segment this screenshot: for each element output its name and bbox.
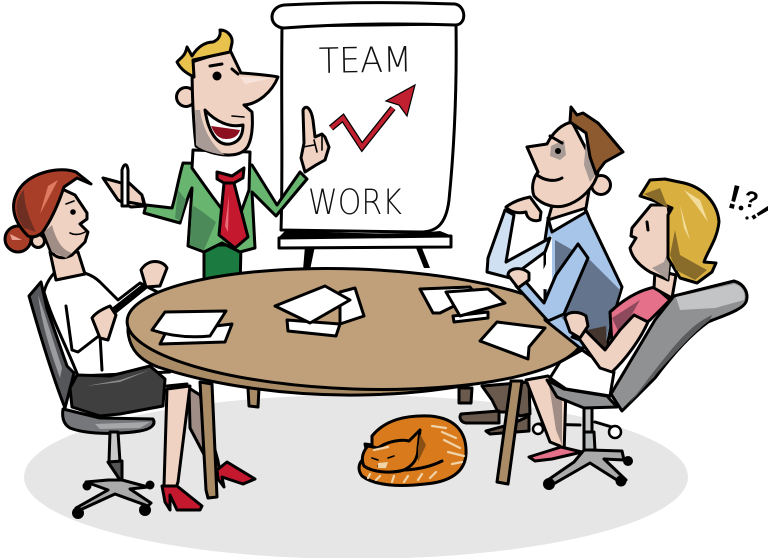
exclamation marks: ?: [742, 185, 760, 213]
left woman's skirt: [70, 366, 165, 416]
left woman's ear: [32, 234, 44, 248]
right woman's legs and pink shoe: [526, 376, 582, 461]
man's torso: [545, 208, 622, 348]
man's dark shadow under torso: [587, 326, 607, 348]
papers front sheet: [480, 322, 545, 359]
chair pole and base: [72, 432, 154, 519]
right woman's neck: [654, 270, 676, 298]
man's shirt collar: [548, 205, 586, 232]
right woman's eye: [647, 222, 648, 230]
right woman's chair seat: [547, 380, 617, 408]
left woman's blouse fold lines: [66, 306, 102, 370]
man's hand under chin: [506, 197, 541, 221]
presenter left hand with pen: [103, 165, 145, 207]
right woman's hair: [640, 179, 719, 283]
presenter in green jacket: [103, 30, 329, 290]
right woman's skirt: [550, 350, 614, 396]
rising red arrow: [331, 85, 415, 147]
table front left leg: [200, 382, 217, 498]
exclamation marks: !: [724, 178, 744, 218]
table back legs: [248, 388, 472, 407]
right woman's arm: [572, 315, 648, 372]
left woman's blouse: [44, 268, 170, 376]
left woman's head: [38, 188, 88, 258]
thinking man in blue shirt: [487, 107, 623, 348]
left woman's chair: [29, 282, 154, 519]
round table: [125, 261, 585, 397]
man's ear: [592, 176, 610, 194]
left woman's neck: [50, 252, 85, 280]
presenter face details: [205, 64, 244, 144]
man's face details: [537, 136, 562, 180]
presenter shirt: [192, 150, 250, 215]
papers on the table: [152, 286, 545, 359]
presenter head: [192, 50, 278, 155]
man's fist on table: [508, 269, 529, 288]
man's raised arm: [487, 210, 550, 278]
left woman's front leg: [164, 384, 190, 488]
left woman: [5, 170, 255, 510]
cat body: [359, 416, 466, 485]
right woman's hand: [565, 312, 588, 338]
flipchart heading TEAM: TEAM: [318, 40, 412, 82]
man's hair: [570, 107, 623, 174]
man's white shirt front: [535, 236, 552, 290]
left woman's hair bun: [5, 226, 31, 252]
table front right leg: [497, 381, 522, 484]
papers right stack: [420, 287, 505, 322]
presenter ear: [176, 88, 196, 106]
papers centre stack: [275, 286, 364, 336]
left woman's back leg: [189, 388, 220, 473]
presenter tie: [217, 168, 248, 248]
presenter hair: [177, 30, 232, 77]
man's head: [527, 122, 598, 207]
presenter jacket and arms: [144, 163, 307, 252]
cat stripes: [368, 426, 464, 482]
flipchart: [272, 3, 464, 270]
presenter trousers: [204, 245, 241, 290]
right woman's head: [630, 205, 672, 280]
left woman's hair: [14, 170, 91, 237]
exclamation marks: [724, 178, 768, 225]
chair seat: [63, 409, 154, 433]
left woman's face details: [66, 201, 87, 234]
presenter right hand pointing up: [301, 107, 329, 172]
right woman's pink top: [610, 287, 670, 345]
floor shadow: [24, 395, 688, 558]
man's torso shadow: [555, 240, 620, 345]
chair back: [29, 282, 74, 408]
left woman's hands and pen: [92, 262, 167, 340]
right woman's chair back: [611, 281, 747, 411]
man's neck: [548, 185, 590, 220]
sleeping orange cat: [359, 416, 466, 485]
cat head and tail marks: [362, 430, 442, 472]
right woman: [547, 179, 747, 411]
right woman's chair base: [533, 407, 633, 490]
flipchart heading WORK: WORK: [308, 183, 402, 223]
papers left stack: [152, 311, 232, 344]
left woman's red shoes: [162, 462, 255, 510]
man's trousers and shoes: [460, 382, 530, 434]
man's forearm on the table: [516, 244, 588, 321]
